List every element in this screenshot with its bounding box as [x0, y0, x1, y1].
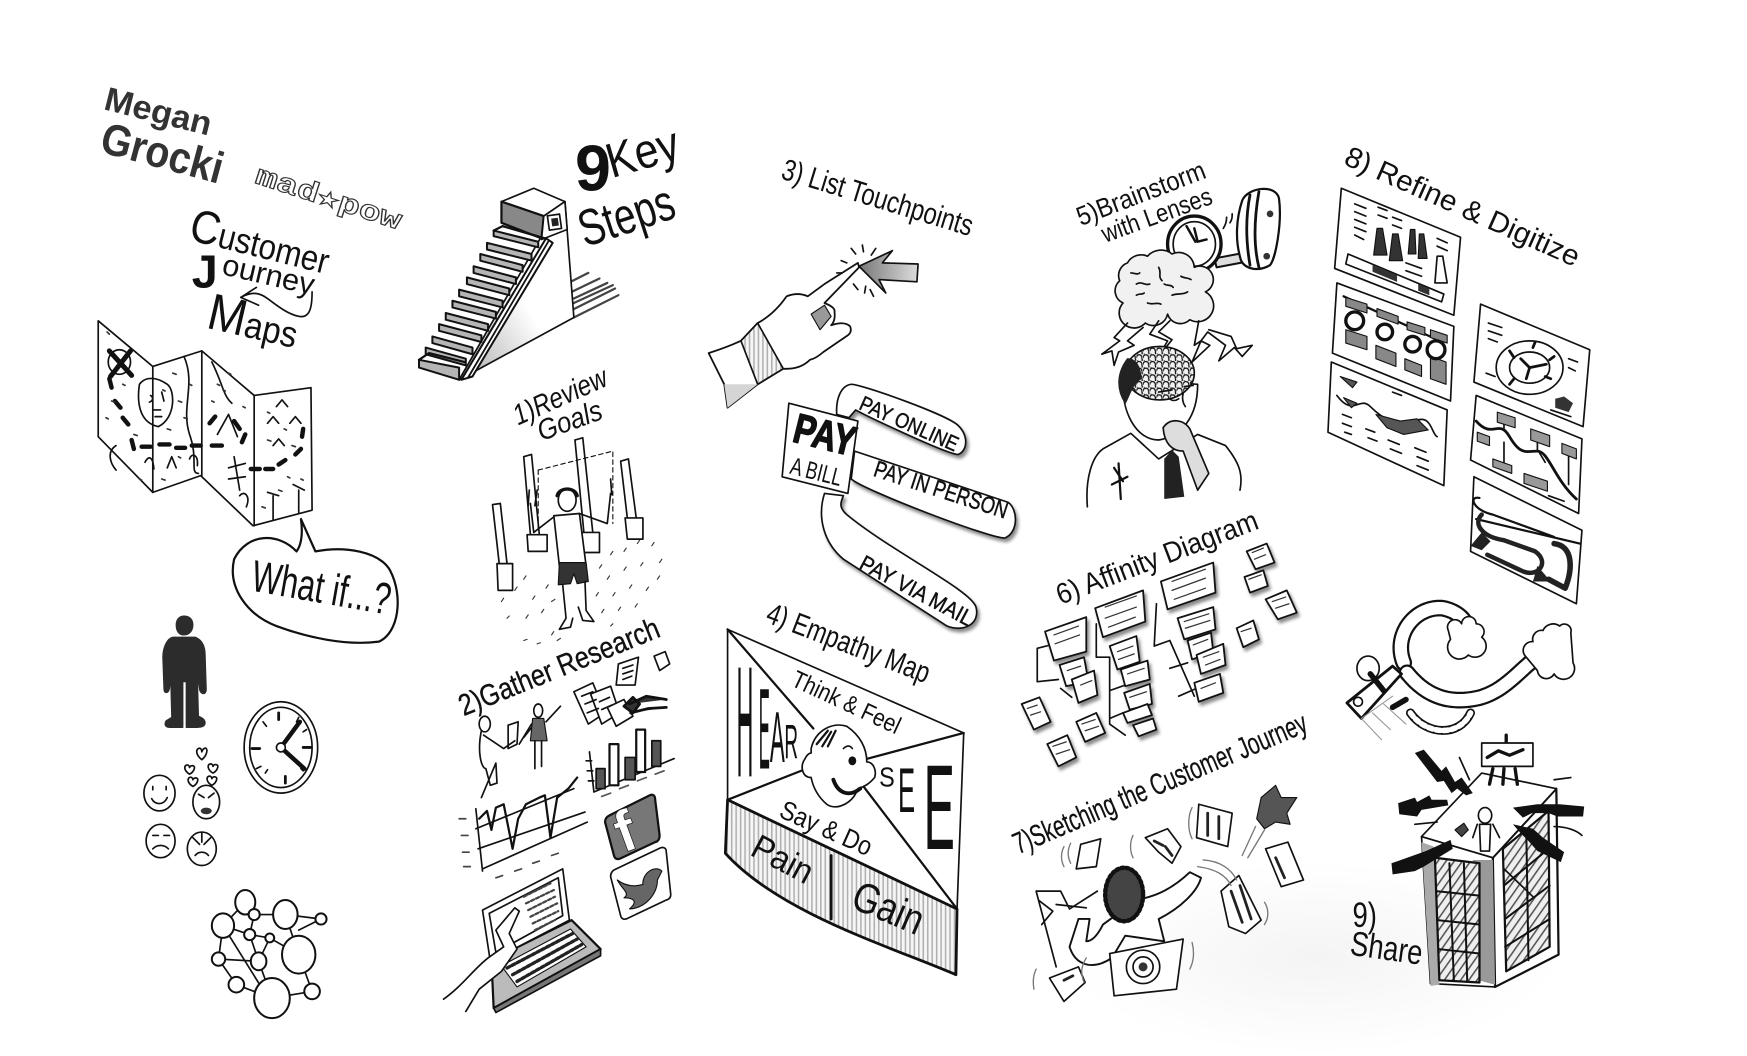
heading: 9 Key Steps: 9 — [575, 132, 611, 204]
option: pay in person: PAY IN PERSON — [871, 456, 1011, 523]
bar chart — [586, 730, 674, 796]
icon: twitter — [611, 848, 671, 919]
affinity diagram sticky notes — [1022, 544, 1297, 766]
label: say and do: Say & Do — [775, 795, 877, 862]
icon: emotion faces and hearts — [144, 748, 220, 866]
illustration: person sketching — [1033, 785, 1303, 1001]
panel: loop path board — [1471, 477, 1582, 604]
option: pay via mail — [821, 493, 977, 631]
panel: touchpoint board — [1332, 283, 1454, 401]
network diagram — [212, 890, 327, 1018]
label: see — [879, 741, 955, 875]
target sheet — [1110, 939, 1183, 996]
illustration: skyscraper — [1391, 735, 1584, 987]
step 1 heading: 1)Review — [508, 361, 614, 432]
treasure map — [98, 321, 312, 526]
title: Customer Journey Maps: Customer — [185, 199, 336, 284]
step 2 heading: 2)Gather Research — [454, 612, 664, 723]
title: Customer Journey Maps — [185, 199, 336, 359]
motion lines — [1033, 808, 1268, 989]
label: pain: Pain — [745, 828, 820, 892]
step 1 heading — [508, 361, 614, 448]
option: pay via mail: PAY VIA MAIL — [856, 550, 977, 631]
icon: facebook — [605, 795, 660, 865]
curly hair — [1105, 868, 1143, 921]
step 4 heading: 4) Empathy Map — [762, 597, 935, 690]
logo: mad pow: mad★pow — [251, 162, 405, 238]
option: pay in person — [851, 451, 1015, 538]
step 9 label: share: Share — [1348, 925, 1425, 973]
panel: persona board — [1335, 188, 1461, 315]
label: see: E — [924, 741, 955, 875]
person body and arms — [1070, 872, 1201, 965]
label: hear: R — [784, 715, 798, 769]
illustration: brain cloud — [1115, 250, 1214, 328]
speech bubble: What if...?: What if...? — [248, 552, 395, 625]
icon: facebook: f — [605, 799, 646, 865]
illustration: lightning bolts — [1102, 321, 1252, 365]
label: hear: A — [770, 698, 785, 778]
heading: 9 Key Steps: Key — [600, 117, 686, 189]
sign: pay a bill — [782, 403, 860, 493]
icon: wall clock — [244, 702, 318, 793]
step 9 label: share — [1348, 895, 1425, 973]
title: Customer Journey Maps: J — [192, 245, 218, 297]
label: hear: H — [736, 634, 753, 810]
illustration: pointing hand and arrow — [709, 245, 918, 408]
heading: 9 Key Steps: Steps — [571, 173, 682, 258]
sign: pay a bill: A BILL — [787, 452, 845, 492]
step 6 heading: 6) Affinity Diagram — [1052, 505, 1263, 611]
step 7 heading: 7)Sketching the Customer Journey — [1008, 707, 1312, 861]
heading: 9 Key Steps — [571, 117, 686, 258]
illustration: hand with documents — [574, 652, 670, 726]
label: see: E — [898, 756, 915, 826]
icon: standing person — [163, 616, 206, 727]
speech bubble: What if...? — [233, 519, 398, 643]
map frame and dividers — [725, 629, 964, 975]
title: Customer Journey Maps: ourney — [219, 249, 318, 302]
step 9 label: share: 9) — [1352, 895, 1377, 935]
crumpled burst — [1257, 785, 1297, 829]
step 5 heading: 5)Brainstorm — [1072, 155, 1210, 232]
panel: circular journey board — [1474, 304, 1590, 427]
illustration: review goals goal posts — [493, 438, 662, 644]
label: hear: E — [759, 666, 770, 794]
empathy map diagram — [725, 629, 964, 975]
panel: experience curve board — [1328, 362, 1447, 486]
label: gain: Gain — [845, 872, 932, 944]
label: hear — [736, 634, 798, 810]
title: Customer Journey Maps: Maps — [203, 283, 304, 359]
step 5 heading: with Lenses — [1097, 183, 1216, 249]
step 3 heading: 3) List Touchpoints — [778, 153, 977, 243]
illustration: thinking man — [1087, 346, 1241, 507]
pay a bill flow — [782, 384, 1015, 631]
illustration: laptop with hand — [444, 869, 601, 1013]
author name: Megan — [101, 81, 216, 143]
sign: pay a bill: PAY — [789, 406, 860, 466]
billboard — [1482, 735, 1533, 784]
paper shading — [1070, 862, 1560, 1054]
panel: journey line board — [1471, 395, 1582, 514]
icon: smiling face — [802, 725, 875, 807]
illustration: interview people — [479, 704, 560, 798]
option: pay online — [837, 384, 966, 456]
author name — [96, 81, 229, 193]
line chart — [459, 778, 587, 878]
illustration: lens device — [1168, 189, 1280, 272]
megaphone bolts — [1391, 750, 1584, 874]
step 1 heading: Goals — [533, 395, 607, 448]
label: see: S — [879, 763, 895, 793]
flying papers — [1036, 804, 1303, 1001]
illustration: smoke rope and winding device — [1347, 608, 1575, 740]
label: think and feel: Think & Feel — [787, 666, 905, 740]
staircase illustration — [419, 188, 618, 380]
option: pay online: PAY ONLINE — [856, 392, 962, 456]
step 8 heading: 8) Refine & Digitize — [1340, 141, 1585, 273]
author name: Grocki — [96, 114, 229, 193]
